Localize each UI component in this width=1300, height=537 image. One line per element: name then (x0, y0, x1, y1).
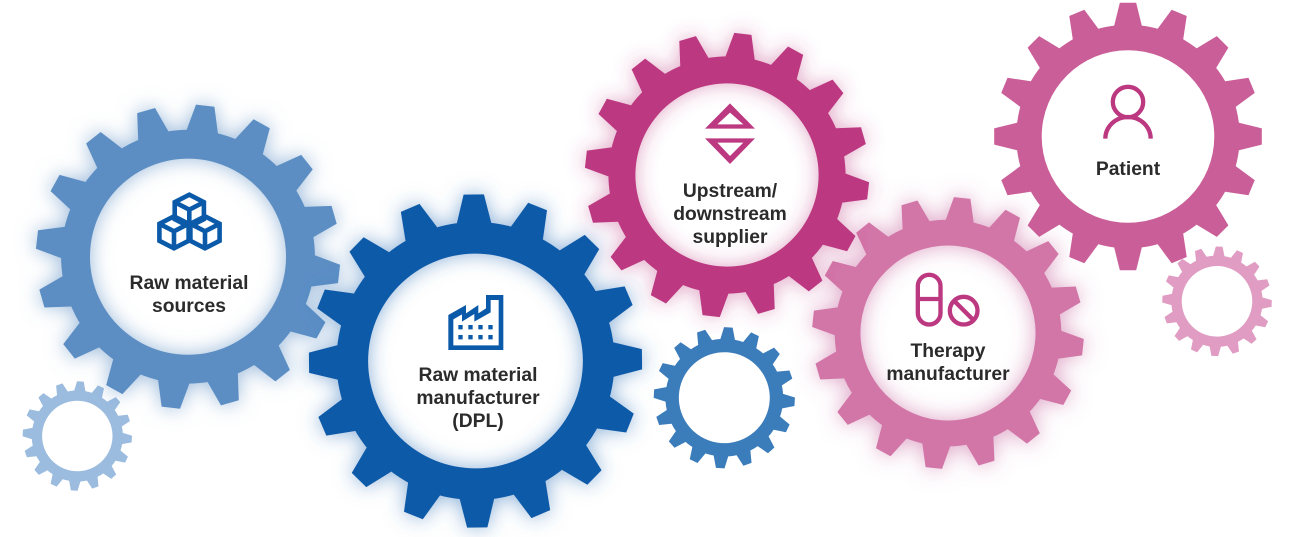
gear shape: mid blue (20, 88, 356, 425)
gear: upstream/downstream supplier (570, 18, 884, 332)
gear: patient (994, 3, 1262, 270)
icon: person (1105, 87, 1151, 139)
label: therapy manufacturer: manufacturer (886, 364, 1010, 385)
gear shape: light pink (799, 184, 1097, 482)
small gear: blue (650, 323, 799, 472)
icon: capsule and no symbol (918, 275, 977, 324)
label: raw material manufacturer (DPL): (DPL) (452, 411, 504, 432)
label: raw material manufacturer (DPL): manufacturer (416, 388, 540, 409)
label: upstream/downstream supplier: downstream (673, 204, 787, 225)
icon: stacked cubes (159, 195, 220, 248)
label: raw material sources: Raw material (130, 273, 248, 294)
gear: therapy manufacturer (799, 184, 1097, 482)
label: therapy manufacturer: Therapy (910, 341, 986, 362)
label: upstream/downstream supplier: supplier (692, 227, 768, 248)
small gear: pale pink (1160, 244, 1274, 358)
label: raw material manufacturer (DPL): Raw material (419, 365, 537, 386)
gear shape: dark blue (307, 193, 644, 529)
icon: up and down triangles (705, 103, 755, 164)
gear: raw material manufacturer (307, 193, 644, 529)
label: patient: Patient (1096, 159, 1161, 180)
gear shape: rose pink (994, 3, 1262, 270)
gear shape: magenta (570, 18, 884, 332)
label: upstream/downstream supplier: Upstream/ (683, 181, 778, 202)
gear: raw material sources (20, 88, 356, 425)
label: raw material sources: sources (152, 296, 226, 317)
small gear: light blue (20, 378, 135, 494)
icon: factory (448, 295, 503, 350)
